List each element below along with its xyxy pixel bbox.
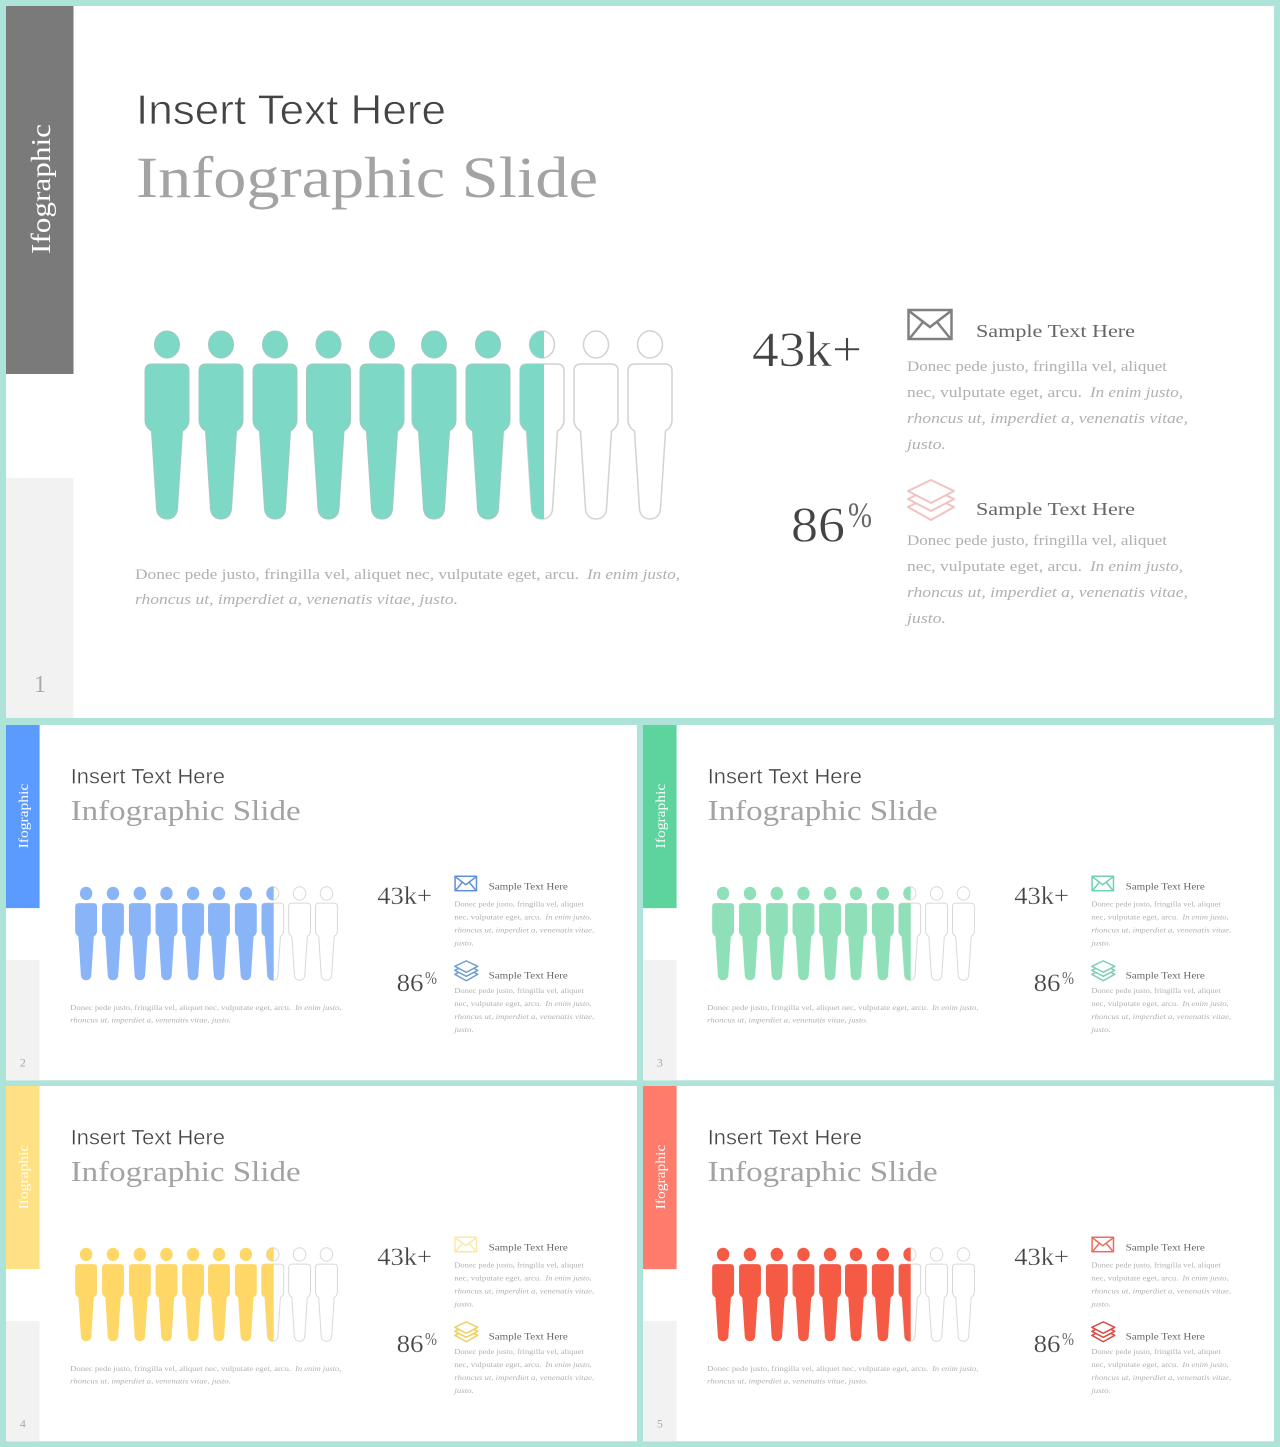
text block 2: nec, vulputate eget, arcu. bbox=[454, 999, 542, 1008]
text block 2: nec, vulputate eget, arcu. bbox=[1091, 999, 1179, 1008]
stat: 43k+: 43k+ bbox=[377, 883, 432, 910]
page number block: 2 bbox=[20, 1055, 26, 1069]
sidebar tab bbox=[643, 725, 677, 908]
text block 1: rhoncus ut, imperdiet a, venenatis vitae, bbox=[1091, 1286, 1231, 1295]
text block 2: justo. bbox=[453, 1025, 474, 1034]
text block 2 bbox=[905, 499, 1188, 627]
stat: 86%: 86 bbox=[1034, 970, 1060, 997]
pictogram chart: 7.5 of 10 people bbox=[145, 331, 672, 519]
stat: 86%: % bbox=[1062, 1329, 1074, 1349]
title: Infographic Slide bbox=[71, 1156, 301, 1188]
panel: slide 1 bbox=[6, 6, 1274, 718]
text block 2: Sample Text Here bbox=[976, 499, 1135, 519]
stat: 86% bbox=[1034, 1329, 1074, 1358]
sidebar tab: Ifographic bbox=[16, 1145, 31, 1209]
text block 1: Donec pede justo, fringilla vel, aliquet bbox=[907, 359, 1168, 375]
text block 1: Sample Text Here bbox=[976, 321, 1135, 341]
page number block: 1 bbox=[34, 672, 46, 698]
sidebar tab: Ifographic bbox=[26, 124, 56, 254]
page number block: 4 bbox=[20, 1416, 26, 1430]
text block 2: justo. bbox=[905, 611, 946, 627]
stat: 43k+: 43k+ bbox=[752, 321, 862, 377]
text block 1: justo. bbox=[905, 437, 946, 453]
stat: 43k+: 43k+ bbox=[1014, 1244, 1069, 1271]
title: Infographic Slide bbox=[708, 795, 938, 827]
text block 2: Sample Text Here bbox=[1126, 970, 1205, 980]
text block 1: Donec pede justo, fringilla vel, aliquet bbox=[454, 1261, 585, 1270]
text block 2: rhoncus ut, imperdiet a, venenatis vitae, bbox=[454, 1012, 594, 1021]
stat: 86% bbox=[397, 1329, 437, 1358]
page number block bbox=[6, 478, 74, 718]
text block 2: rhoncus ut, imperdiet a, venenatis vitae, bbox=[907, 585, 1188, 601]
caption bbox=[707, 1364, 979, 1386]
text block 2: Sample Text Here bbox=[1126, 1331, 1205, 1341]
text block 2: Donec pede justo, fringilla vel, aliquet bbox=[454, 986, 585, 995]
caption: rhoncus ut, imperdiet a, venenatis vitae, justo. bbox=[70, 1377, 231, 1386]
text block 1 bbox=[453, 882, 594, 947]
stat: 86%: % bbox=[425, 1329, 437, 1349]
text block 1: justo. bbox=[453, 938, 474, 947]
stat: 43k+: 43k+ bbox=[1014, 883, 1069, 910]
text block 1: Donec pede justo, fringilla vel, aliquet bbox=[1091, 1261, 1222, 1270]
stat: 86%: 86 bbox=[791, 496, 845, 552]
page number block bbox=[6, 960, 40, 1080]
pictogram chart: 7.5 of 10 people bbox=[75, 1248, 337, 1341]
stat: 43k+: 43k+ bbox=[377, 1244, 432, 1271]
text block 2 bbox=[453, 1331, 594, 1395]
sidebar tab bbox=[6, 725, 40, 908]
text block 1: rhoncus ut, imperdiet a, venenatis vitae, bbox=[454, 1286, 594, 1295]
title: Insert Text Here bbox=[136, 86, 446, 133]
stat: 86% bbox=[1034, 968, 1074, 997]
text block 1: Donec pede justo, fringilla vel, aliquet bbox=[454, 900, 585, 909]
caption: In enim justo, bbox=[294, 1003, 342, 1012]
sidebar tab bbox=[6, 1086, 40, 1269]
page number block bbox=[643, 1321, 677, 1441]
text block 1: nec, vulputate eget, arcu. bbox=[1091, 1274, 1179, 1283]
title bbox=[708, 1127, 938, 1188]
text block 1: rhoncus ut, imperdiet a, venenatis vitae, bbox=[907, 411, 1188, 427]
icon: envelope bbox=[1092, 1237, 1113, 1252]
text block 1: justo. bbox=[1090, 1299, 1111, 1308]
text block 2: nec, vulputate eget, arcu. bbox=[907, 559, 1082, 575]
sidebar tab: Ifographic bbox=[653, 784, 668, 848]
text block 1: Sample Text Here bbox=[1126, 1243, 1205, 1253]
text block 1: justo. bbox=[453, 1299, 474, 1308]
text block 2: Donec pede justo, fringilla vel, aliquet bbox=[454, 1347, 585, 1356]
icon: layers bbox=[1092, 961, 1115, 981]
title bbox=[71, 766, 301, 827]
text block 2: Sample Text Here bbox=[489, 1331, 568, 1341]
text block 1: justo. bbox=[1090, 938, 1111, 947]
icon: envelope bbox=[908, 310, 952, 339]
text block 2: rhoncus ut, imperdiet a, venenatis vitae, bbox=[1091, 1012, 1231, 1021]
caption: In enim justo, bbox=[931, 1364, 979, 1373]
text block 2 bbox=[1090, 1331, 1231, 1395]
text block 2 bbox=[1090, 970, 1231, 1034]
text block 1: nec, vulputate eget, arcu. bbox=[454, 1274, 542, 1283]
text block 1: rhoncus ut, imperdiet a, venenatis vitae, bbox=[454, 925, 594, 934]
icon: envelope bbox=[455, 1237, 476, 1252]
caption: In enim justo, bbox=[294, 1364, 342, 1373]
text block 2: In enim justo, bbox=[544, 999, 592, 1008]
text block 2: justo. bbox=[1090, 1025, 1111, 1034]
text block 2: nec, vulputate eget, arcu. bbox=[1091, 1360, 1179, 1369]
icon: layers bbox=[455, 1322, 478, 1342]
text block 1: In enim justo, bbox=[1181, 1274, 1229, 1283]
text block 1 bbox=[905, 321, 1188, 453]
stat: 86% bbox=[791, 495, 872, 552]
sidebar tab bbox=[6, 6, 74, 374]
pictogram chart: 7.5 of 10 people bbox=[712, 887, 974, 980]
text block 1: In enim justo, bbox=[544, 913, 592, 922]
text block 2: In enim justo, bbox=[1089, 559, 1183, 575]
panel: slide 4 (yellow) bbox=[6, 1086, 637, 1441]
title: Infographic Slide bbox=[136, 145, 598, 210]
page number block bbox=[6, 1321, 40, 1441]
title: Infographic Slide bbox=[708, 1156, 938, 1188]
text block 1: In enim justo, bbox=[1089, 385, 1183, 401]
pictogram chart: 7.5 of 10 people bbox=[75, 887, 337, 980]
icon: layers bbox=[455, 961, 478, 981]
title: Insert Text Here bbox=[708, 1127, 862, 1150]
title: Insert Text Here bbox=[71, 1127, 225, 1150]
text block 2: rhoncus ut, imperdiet a, venenatis vitae, bbox=[454, 1373, 594, 1382]
stat: 86%: 86 bbox=[397, 970, 423, 997]
caption: rhoncus ut, imperdiet a, venenatis vitae, justo. bbox=[135, 592, 458, 608]
text block 1: Donec pede justo, fringilla vel, aliquet bbox=[1091, 900, 1222, 909]
title bbox=[136, 86, 598, 210]
caption: Donec pede justo, fringilla vel, aliquet nec, vulputate eget, arcu. bbox=[707, 1003, 928, 1012]
page number block: 3 bbox=[657, 1055, 663, 1069]
text block 2: In enim justo, bbox=[1181, 999, 1229, 1008]
sidebar tab bbox=[643, 1086, 677, 1269]
title bbox=[708, 766, 938, 827]
text block 2: Donec pede justo, fringilla vel, aliquet bbox=[1091, 986, 1222, 995]
caption: rhoncus ut, imperdiet a, venenatis vitae, justo. bbox=[70, 1016, 231, 1025]
text block 1 bbox=[1090, 882, 1231, 947]
caption: rhoncus ut, imperdiet a, venenatis vitae, justo. bbox=[707, 1016, 868, 1025]
caption bbox=[70, 1003, 342, 1025]
text block 2: rhoncus ut, imperdiet a, venenatis vitae, bbox=[1091, 1373, 1231, 1382]
text block 2: Donec pede justo, fringilla vel, aliquet bbox=[907, 533, 1168, 549]
text block 1: rhoncus ut, imperdiet a, venenatis vitae, bbox=[1091, 925, 1231, 934]
title: Insert Text Here bbox=[708, 766, 862, 789]
stat: 86%: % bbox=[848, 495, 872, 535]
text block 1 bbox=[1090, 1243, 1231, 1308]
text block 1: nec, vulputate eget, arcu. bbox=[1091, 913, 1179, 922]
text block 2 bbox=[453, 970, 594, 1034]
icon: layers bbox=[908, 480, 954, 520]
caption: rhoncus ut, imperdiet a, venenatis vitae, justo. bbox=[707, 1377, 868, 1386]
panel: slide 5 (red) bbox=[643, 1086, 1274, 1441]
text block 1: Sample Text Here bbox=[1126, 882, 1205, 892]
icon: envelope bbox=[1092, 876, 1113, 891]
text block 1: In enim justo, bbox=[544, 1274, 592, 1283]
stat: 86%: 86 bbox=[397, 1331, 423, 1358]
stat: 86%: % bbox=[1062, 968, 1074, 988]
sidebar tab: Ifographic bbox=[16, 784, 31, 848]
text block 2: nec, vulputate eget, arcu. bbox=[454, 1360, 542, 1369]
caption bbox=[135, 567, 680, 608]
text block 2: justo. bbox=[453, 1386, 474, 1395]
icon: envelope bbox=[455, 876, 476, 891]
caption: Donec pede justo, fringilla vel, aliquet nec, vulputate eget, arcu. bbox=[135, 567, 579, 583]
panel: slide 2 (blue) bbox=[6, 725, 637, 1080]
text block 2: Sample Text Here bbox=[489, 970, 568, 980]
text block 1: nec, vulputate eget, arcu. bbox=[907, 385, 1082, 401]
page number block bbox=[643, 960, 677, 1080]
text block 2: In enim justo, bbox=[1181, 1360, 1229, 1369]
caption: Donec pede justo, fringilla vel, aliquet nec, vulputate eget, arcu. bbox=[707, 1364, 928, 1373]
text block 2: justo. bbox=[1090, 1386, 1111, 1395]
stat: 86% bbox=[397, 968, 437, 997]
text block 1: Sample Text Here bbox=[489, 882, 568, 892]
caption bbox=[707, 1003, 979, 1025]
title bbox=[71, 1127, 301, 1188]
text block 1 bbox=[453, 1243, 594, 1308]
icon: layers bbox=[1092, 1322, 1115, 1342]
title: Infographic Slide bbox=[71, 795, 301, 827]
text block 1: Sample Text Here bbox=[489, 1243, 568, 1253]
caption: Donec pede justo, fringilla vel, aliquet nec, vulputate eget, arcu. bbox=[70, 1003, 291, 1012]
caption bbox=[70, 1364, 342, 1386]
pictogram chart: 7.5 of 10 people bbox=[712, 1248, 974, 1341]
caption: In enim justo, bbox=[586, 567, 680, 583]
sidebar tab: Ifographic bbox=[653, 1145, 668, 1209]
page number block: 5 bbox=[657, 1416, 663, 1430]
panel: slide 3 (green) bbox=[643, 725, 1274, 1080]
stat: 86%: 86 bbox=[1034, 1331, 1060, 1358]
stat: 86%: % bbox=[425, 968, 437, 988]
text block 1: nec, vulputate eget, arcu. bbox=[454, 913, 542, 922]
caption: In enim justo, bbox=[931, 1003, 979, 1012]
text block 2: Donec pede justo, fringilla vel, aliquet bbox=[1091, 1347, 1222, 1356]
caption: Donec pede justo, fringilla vel, aliquet nec, vulputate eget, arcu. bbox=[70, 1364, 291, 1373]
text block 2: In enim justo, bbox=[544, 1360, 592, 1369]
text block 1: In enim justo, bbox=[1181, 913, 1229, 922]
title: Insert Text Here bbox=[71, 766, 225, 789]
